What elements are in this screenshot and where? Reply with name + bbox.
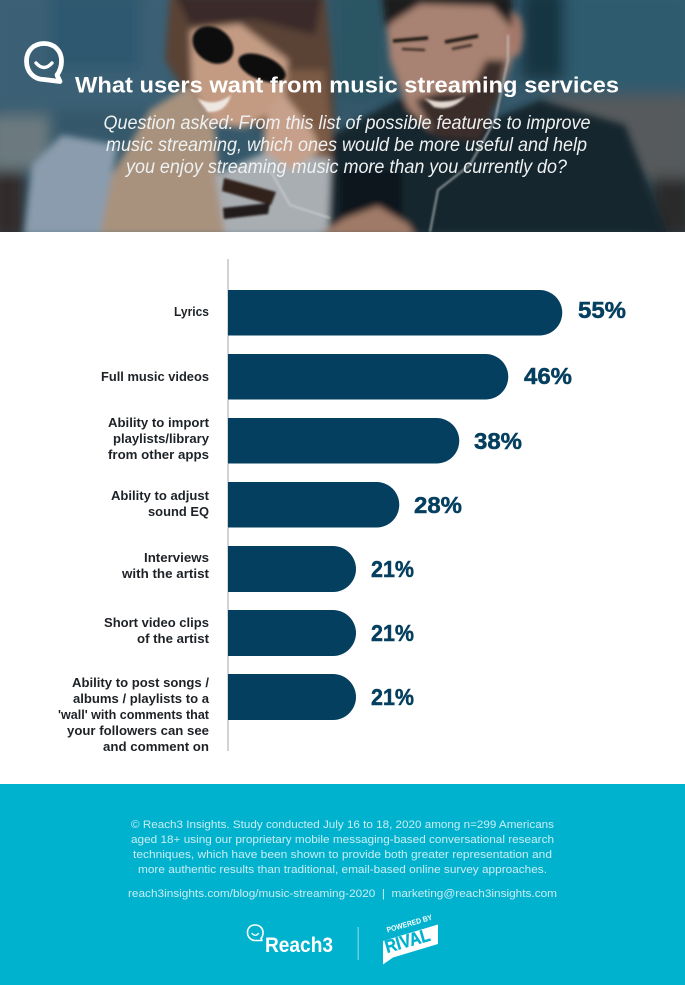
footnote text: aged 18+ using our proprietary mobile messaging-based conversational research (131, 834, 554, 846)
footer panel (0, 784, 685, 985)
bar: adjust sound EQ 28% (111, 482, 462, 528)
man brows and eyes (393, 36, 478, 42)
bar: short video clips 21%: 21% (371, 620, 414, 646)
bar: Lyrics 55%: 55% (578, 297, 626, 323)
bar: adjust sound EQ 28%: sound EQ (148, 505, 209, 519)
bar: interviews 21%: 21% (371, 556, 414, 582)
man smile (424, 96, 466, 108)
bar: short video clips 21% (104, 610, 414, 656)
footnote text: © Reach3 Insights. Study conducted July 16 to 18, 2020 among n=299 Americans (131, 819, 555, 831)
bar: import playlists 38%: playlists/library (113, 432, 209, 446)
Reach3 logo (248, 925, 333, 957)
sunglasses (191, 24, 235, 66)
Reach3 logo: Reach3 (265, 934, 333, 957)
bar: interviews 21% (121, 546, 414, 592)
bar chart (58, 259, 626, 754)
woman shirt (24, 135, 118, 235)
bar: post to wall 21%: and comment on (103, 740, 209, 754)
footnote text (131, 819, 555, 876)
phone (340, 170, 402, 216)
bar: adjust sound EQ 28%: Ability to adjust (111, 489, 210, 503)
bar: interviews 21%: with the artist (121, 567, 210, 581)
man beard (415, 60, 506, 140)
bar: adjust sound EQ 28%: 28% (414, 492, 462, 518)
bar: interviews 21%: Interviews (144, 551, 209, 565)
fingers (318, 206, 415, 235)
woman face (190, 24, 288, 128)
question text: music streaming, which ones would be more useful and help (106, 135, 587, 156)
footnote text: more authentic results than traditional, email-based online survey approaches. (138, 864, 547, 876)
bar: import playlists 38%: 38% (474, 428, 522, 454)
footnote text: techniques, which have been shown to provide both greater representation and (133, 849, 552, 861)
question text (104, 113, 590, 178)
Powered by Rival logo: RIVAL (383, 925, 432, 957)
man face (384, 0, 512, 137)
blond hair (98, 85, 225, 235)
bar: import playlists 38%: from other apps (108, 448, 209, 462)
dark upper hair (165, 0, 335, 140)
bar: Full music videos 46% (101, 354, 572, 400)
bar: Full music videos 46%: 46% (524, 363, 572, 389)
bar: post to wall 21%: 'wall' with comments that (58, 708, 210, 722)
earphone cables (430, 35, 508, 232)
bar: Full music videos 46%: Full music videos (101, 370, 209, 384)
bar: Lyrics 55% (174, 290, 626, 336)
bar: post to wall 21% (58, 674, 414, 754)
man hair (382, 0, 512, 30)
bar: short video clips 21%: of the artist (137, 632, 210, 646)
question text: you enjoy streaming music more than you currently do? (124, 157, 567, 178)
bar: post to wall 21%: 21% (371, 684, 414, 710)
hair right of hand (280, 70, 335, 170)
bar: post to wall 21%: albums / playlists to a (73, 692, 210, 706)
hand at woman's cheek (262, 93, 320, 170)
bar: import playlists 38% (108, 416, 522, 464)
brand speech bubble logo (26, 44, 62, 82)
bar: short video clips 21%: Short video clips (104, 616, 209, 630)
man ear (507, 13, 523, 57)
bar: import playlists 38%: Ability to import (108, 416, 210, 430)
Powered by Rival logo (383, 913, 438, 964)
man shirt (328, 98, 668, 235)
bar: Lyrics 55%: Lyrics (174, 305, 209, 319)
woman smile (197, 95, 231, 112)
links: reach3insights.com/blog/music-streaming-2020 | marketing@reach3insights.com (128, 888, 557, 900)
header photo: couple listening to music (0, 0, 685, 240)
title: What users want from music streaming services (75, 72, 619, 98)
wristbands (222, 178, 276, 205)
question text: Question asked: From this list of possible features to improve (104, 113, 590, 134)
hat (175, 0, 322, 35)
Powered by Rival logo: POWERED BY (386, 913, 433, 934)
bar: post to wall 21%: Ability to post songs / (72, 676, 210, 690)
bar: post to wall 21%: your followers can see (67, 724, 209, 738)
